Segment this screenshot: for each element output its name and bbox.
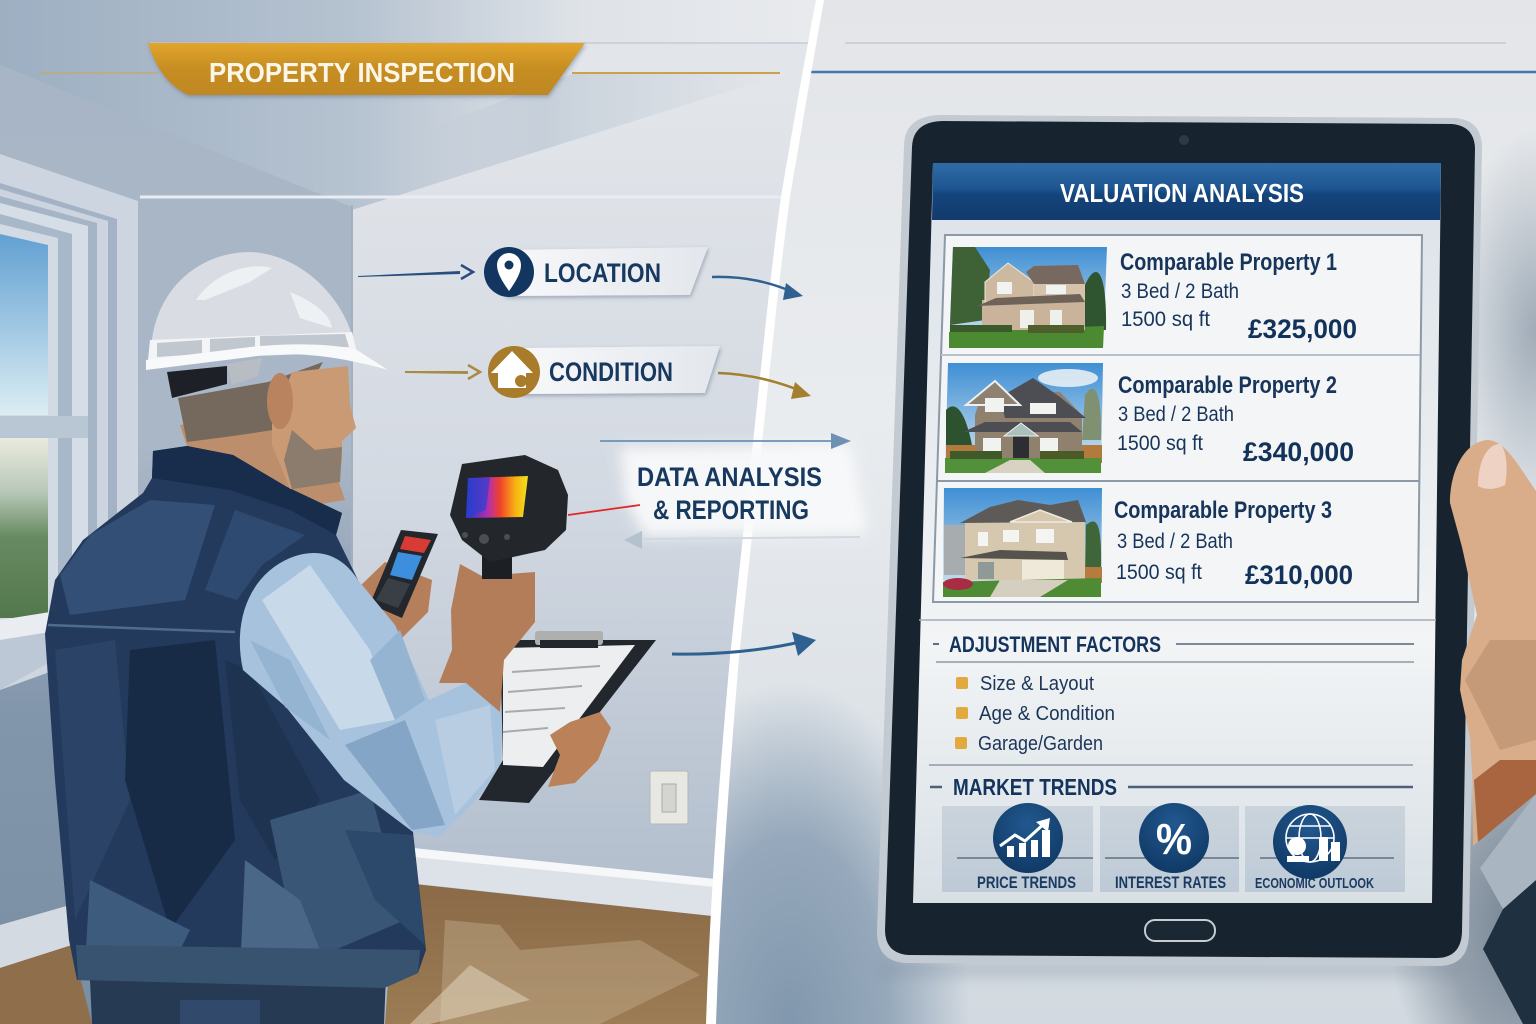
ceiling — [0, 0, 830, 210]
tile: price trends: PRICE TRENDS — [977, 873, 1076, 892]
arrow: report to tablet — [672, 632, 816, 656]
clipboard — [479, 631, 656, 803]
neck — [180, 400, 345, 510]
title 2: Comparable Property 2 — [1118, 372, 1337, 399]
area 2: 1500 sq ft — [1117, 432, 1203, 455]
price 3: £310,000 — [1245, 560, 1353, 590]
panel: inspection room background — [0, 0, 890, 1024]
tile: economic outlook: ECONOMIC OUTLOOK — [1255, 875, 1374, 892]
panel: valuation background — [700, 0, 1536, 1024]
arrow onward — [712, 277, 798, 294]
comparable list — [933, 235, 1422, 602]
tile: economic outlook — [1245, 805, 1405, 892]
adjustment factors — [933, 632, 1414, 755]
divider — [706, 0, 824, 1024]
thermal camera — [450, 455, 568, 579]
hat strap — [167, 366, 227, 398]
house photo 1 — [949, 247, 1107, 348]
tablet — [877, 115, 1482, 966]
arrow onward — [718, 373, 806, 393]
tile: price trends — [942, 803, 1093, 892]
area 1: 1500 sq ft — [1121, 308, 1210, 331]
hair — [178, 362, 323, 442]
tile: interest rates: % — [1156, 815, 1192, 864]
top arrow — [600, 440, 835, 442]
header bar — [932, 163, 1441, 220]
callout: location — [358, 247, 803, 300]
bullet list — [955, 673, 1115, 755]
left baseboard — [0, 905, 72, 968]
comparable property 3 — [943, 488, 1353, 597]
screen — [913, 163, 1441, 903]
icon: window — [0, 154, 138, 690]
location pill — [505, 247, 708, 296]
light switch — [650, 771, 688, 824]
floor — [385, 882, 712, 1024]
ear — [267, 373, 293, 429]
callout: data analysis and reporting — [568, 433, 868, 549]
beds 3: 3 Bed / 2 Bath — [1117, 530, 1233, 553]
comparable property 1 — [949, 247, 1357, 348]
inspector figure — [45, 252, 656, 1024]
section heading: ADJUSTMENT FACTORS — [949, 632, 1161, 657]
bullet list: Age & Condition — [979, 703, 1115, 725]
shirt arm — [240, 553, 503, 837]
sleeve — [1483, 880, 1536, 1024]
arrow to location — [358, 271, 460, 277]
title 1: Comparable Property 1 — [1120, 249, 1337, 276]
face — [272, 366, 356, 489]
label: DATA ANALYSIS — [637, 462, 822, 492]
title: PROPERTY INSPECTION — [209, 57, 515, 88]
location label: LOCATION — [544, 258, 661, 288]
left hand — [358, 562, 432, 645]
house photo 3 — [943, 488, 1102, 597]
home button — [1145, 920, 1215, 941]
comparable property 2 — [945, 363, 1354, 473]
vest — [45, 446, 426, 988]
thumbnail — [1478, 444, 1507, 489]
tile: interest rates: INTEREST RATES — [1115, 873, 1226, 892]
bullet list: Size & Layout — [980, 673, 1094, 695]
house photo 2 — [945, 363, 1103, 473]
forearm and hand — [439, 564, 535, 712]
price 1: £325,000 — [1248, 314, 1357, 344]
callout: condition — [405, 346, 811, 399]
beds 1: 3 Bed / 2 Bath — [1121, 280, 1239, 303]
laser line — [568, 505, 640, 515]
tile: interest rates — [1100, 803, 1239, 892]
price 2: £340,000 — [1243, 437, 1354, 467]
condition label: CONDITION — [549, 357, 673, 387]
left wall — [0, 65, 352, 1024]
callout: data analysis and reporting: & REPORTING — [653, 495, 809, 525]
bullet list: Garage/Garden — [978, 733, 1103, 755]
icon: location pin — [484, 247, 534, 297]
area 3: 1500 sq ft — [1116, 561, 1202, 584]
section heading: MARKET TRENDS — [953, 774, 1117, 800]
title 3: Comparable Property 3 — [1114, 497, 1332, 524]
bottom arrow — [640, 537, 860, 539]
hand holding tablet — [1450, 440, 1536, 1024]
trousers — [90, 975, 386, 1024]
handheld meter — [370, 530, 438, 618]
arrow to condition — [405, 371, 468, 374]
hard hat — [146, 252, 388, 398]
beds 2: 3 Bed / 2 Bath — [1118, 403, 1234, 426]
icon: house — [488, 346, 540, 398]
baseboard — [413, 848, 716, 916]
header title: VALUATION ANALYSIS — [1060, 178, 1304, 208]
heading banner: property inspection — [40, 43, 780, 95]
condition pill — [520, 346, 720, 394]
market trends — [930, 774, 1413, 892]
camera — [1179, 135, 1189, 145]
thumb and palm — [1450, 440, 1536, 846]
right hand on clipboard — [548, 712, 611, 787]
back wall — [352, 64, 815, 1024]
